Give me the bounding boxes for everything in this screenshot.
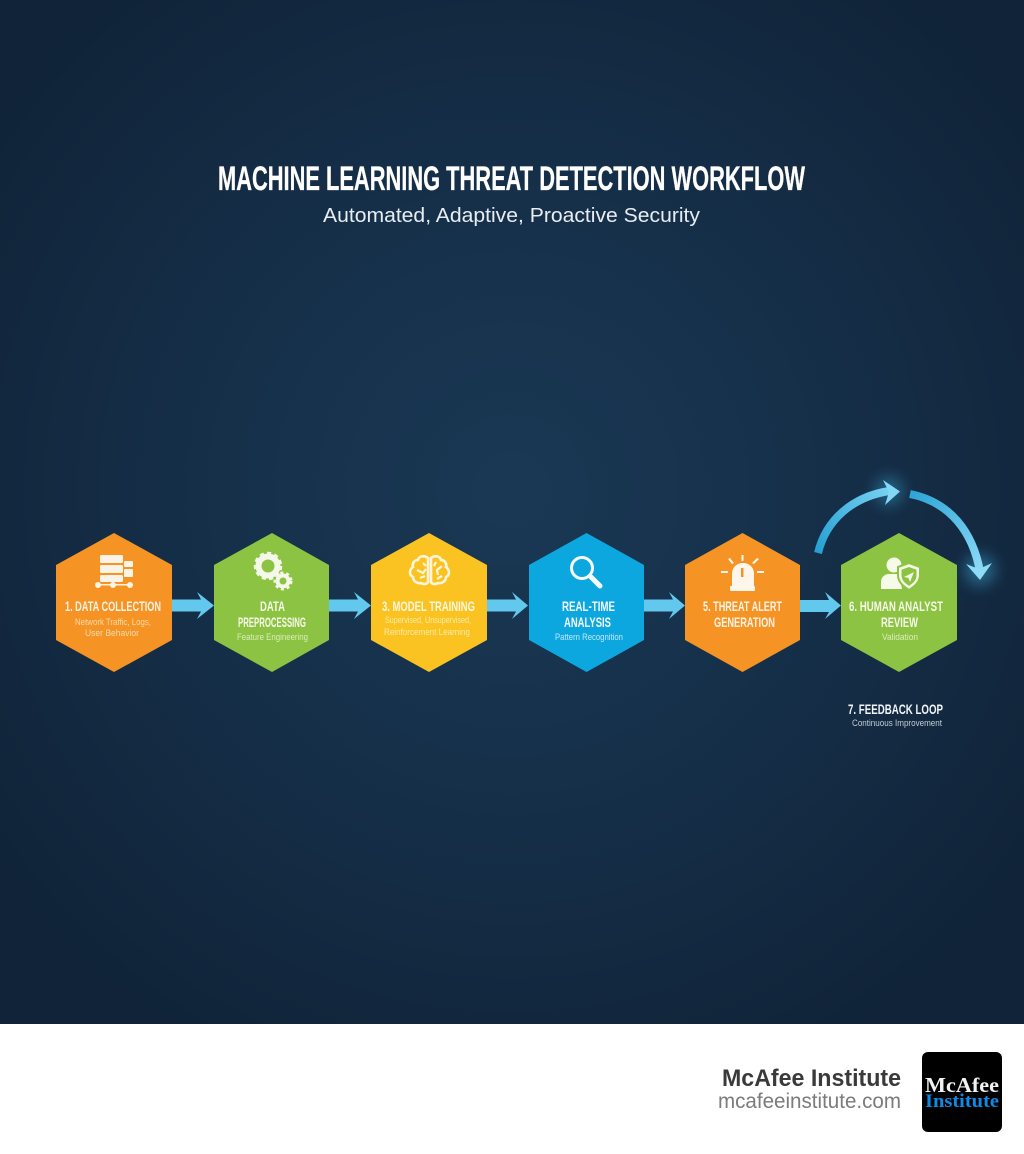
step 2 label: [238, 598, 306, 630]
workflow row: [56, 533, 957, 672]
step 3 description: [384, 615, 471, 637]
step 3: model training: [371, 533, 487, 672]
arrow: step 3 to 4: [487, 592, 528, 619]
step 6: human analyst review: [841, 533, 957, 672]
step 7 description: Continuous Improvement: [852, 718, 942, 729]
step 1 label: 1. DATA COLLECTION: [65, 598, 161, 614]
arrow: curved right: [910, 494, 992, 580]
icon: server: [95, 555, 133, 588]
arrow: curved upper: [818, 480, 900, 553]
icon: magnifying glass: [572, 558, 600, 586]
brand url: mcafeeinstitute.com: [718, 1090, 901, 1113]
brand name: McAfee Institute: [722, 1065, 901, 1092]
icon: brain: [410, 556, 449, 584]
step 7 label: 7. FEEDBACK LOOP: [848, 701, 943, 717]
step 4 description: Pattern Recognition: [555, 632, 623, 643]
step 1 description: User Behavior: [85, 628, 139, 639]
step 6 label: 6. HUMAN ANALYST: [849, 598, 943, 614]
logo: Institute: [925, 1091, 999, 1112]
step 5 label: GENERATION: [714, 614, 775, 630]
arrow: step 1 to 2: [172, 592, 214, 619]
logo: [922, 1052, 1002, 1132]
step 4 label: REAL-TIME: [562, 598, 615, 614]
step 4 label: [562, 598, 615, 630]
subtitle: Automated, Adaptive, Proactive Security: [323, 204, 701, 227]
step 3 label: 3. MODEL TRAINING: [382, 598, 475, 614]
step 5: threat alert generation: [685, 533, 800, 672]
step 5 label: 5. THREAT ALERT: [703, 598, 782, 614]
arrow: step 4 to 5: [644, 592, 685, 619]
arrow: step 2 to 3: [329, 592, 371, 619]
step 6 description: Validation: [882, 632, 918, 643]
step 2: data preprocessing: [214, 533, 329, 672]
step 1: data collection: [56, 533, 172, 672]
step 1 description: Network Traffic, Logs,: [75, 617, 151, 628]
feedback loop arrows: [818, 476, 996, 586]
step 7: feedback loop text: [848, 701, 943, 729]
step 5 label: [703, 598, 782, 630]
step 3 description: Reinforcement Learning: [384, 627, 470, 637]
step 4 label: ANALYSIS: [564, 614, 611, 630]
step 2 label: PREPROCESSING: [238, 614, 306, 630]
step 1 description: [75, 617, 151, 639]
arrowhead glows: [874, 476, 904, 506]
icon: analyst with shield: [881, 558, 920, 590]
icon: alarm siren: [721, 555, 764, 591]
step 2 label: DATA: [260, 598, 285, 614]
arrow: step 5 to 6: [800, 592, 841, 619]
step 6 label: REVIEW: [881, 614, 919, 630]
logo: McAfee: [925, 1073, 999, 1097]
step 3 description: Supervised, Unsupervised,: [385, 615, 471, 625]
step 2 description: Feature Engineering: [237, 632, 308, 643]
step 4: real-time analysis: [529, 533, 644, 672]
step 6 label: [849, 598, 943, 630]
icon: gears: [256, 554, 291, 589]
footer band: [0, 1024, 1024, 1154]
